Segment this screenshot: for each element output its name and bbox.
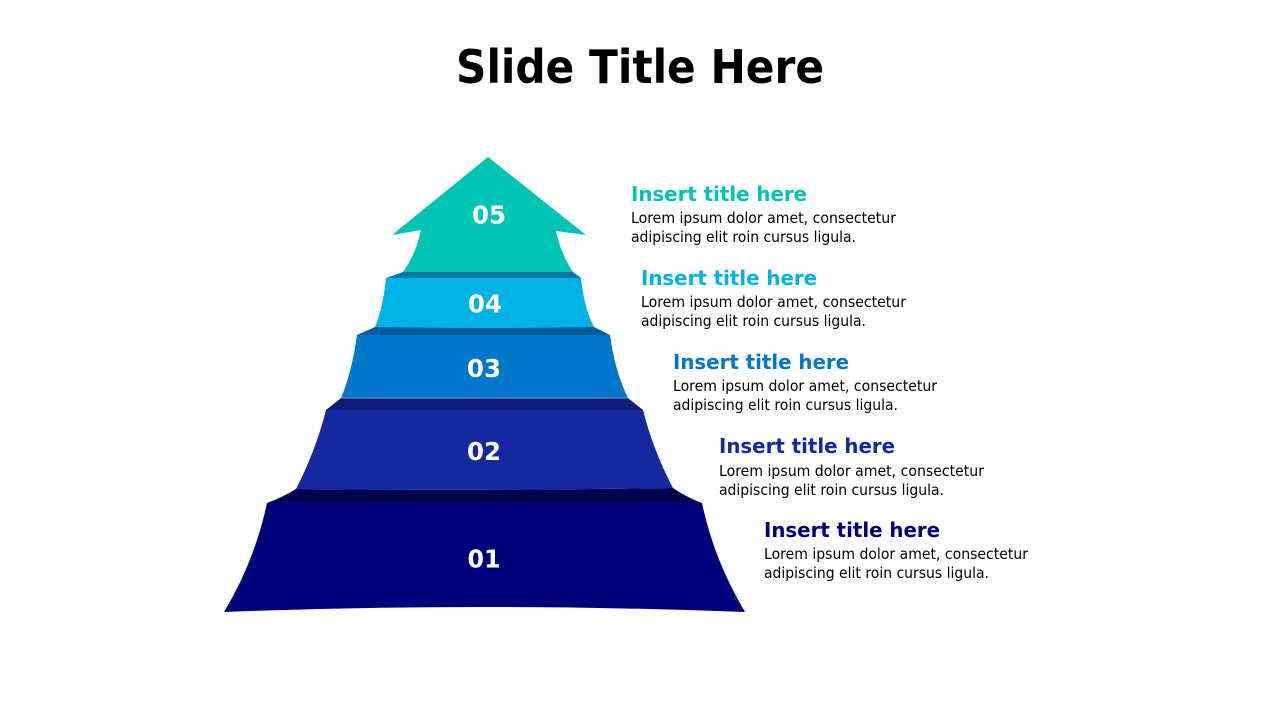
text block 01: Lorem ipsum dolor amet, consectetur: [764, 545, 1029, 563]
text block 01: Insert title here: [764, 518, 940, 542]
tier 01: [224, 488, 745, 612]
tier 03: [341, 327, 628, 398]
tier 01: 01: [468, 544, 500, 574]
tier 05 arrow head: 05: [472, 200, 506, 230]
text block 03: [673, 350, 938, 414]
text block 03: Insert title here: [673, 350, 849, 374]
tier 04: 04: [468, 290, 502, 318]
title: Slide Title Here: [456, 40, 824, 94]
tier 04: [375, 272, 594, 328]
text block 02: [719, 434, 985, 499]
text block 02: Insert title here: [719, 434, 895, 458]
pyramid arrow: [224, 157, 745, 612]
text block 03: adipiscing elit roin cursus ligula.: [673, 396, 898, 414]
text block 05: Lorem ipsum dolor amet, consectetur: [631, 209, 897, 227]
text block 04: Insert title here: [641, 266, 817, 290]
tier 03: 03: [467, 354, 501, 383]
text block 04: Lorem ipsum dolor amet, consectetur: [641, 293, 907, 311]
text block 05: [631, 182, 897, 246]
tier 02: 02: [467, 437, 501, 466]
text block 05: adipiscing elit roin cursus ligula.: [631, 228, 856, 246]
text block 02: Lorem ipsum dolor amet, consectetur: [719, 462, 985, 480]
text block 02: adipiscing elit roin cursus ligula.: [719, 481, 944, 499]
tier 05 arrow head: [392, 157, 586, 272]
tier 02: [296, 398, 673, 490]
text block 01: [764, 518, 1029, 582]
text block 03: Lorem ipsum dolor amet, consectetur: [673, 377, 938, 395]
text block 04: adipiscing elit roin cursus ligula.: [641, 312, 866, 330]
text block 04: [641, 266, 907, 330]
text block 01: adipiscing elit roin cursus ligula.: [764, 564, 989, 582]
text block 05: Insert title here: [631, 182, 807, 206]
